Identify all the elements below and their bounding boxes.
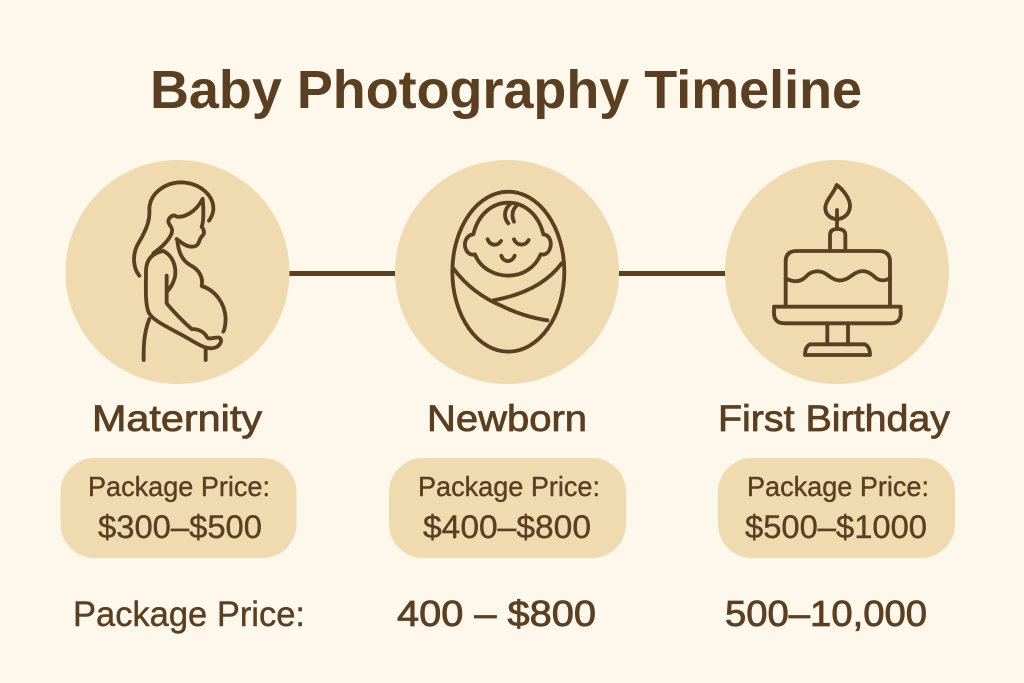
timeline connector: maternity to newborn [289,271,396,276]
price pill: maternity: $300–$500 [98,509,262,545]
price pill: newborn: $400–$800 [423,509,591,545]
price pill: maternity [60,458,296,558]
price pill: maternity: Package Price: [88,471,270,502]
price pill: newborn [389,458,626,558]
title: Baby Photography Timeline [150,60,862,120]
circle: first birthday [725,160,949,384]
circle: maternity [66,160,290,384]
bottom text: newborn price: 400 – $800 [397,593,596,634]
heading: First Birthday: First Birthday [718,398,951,439]
price pill: first birthday [718,458,955,558]
heading: Newborn: Newborn [427,398,587,439]
icon: pregnant woman [134,182,226,360]
icon: birthday cake [774,185,901,355]
bottom text: package price label: Package Price: [73,595,305,634]
bottom text: first birthday price: 500–10,000 [725,593,927,634]
price pill: newborn: Package Price: [418,471,600,502]
icon: swaddled newborn [452,192,564,352]
timeline connector: newborn to first birthday [618,271,726,276]
price pill: first birthday: Package Price: [747,471,929,502]
circle: newborn [395,160,619,384]
price pill: first birthday: $500–$1000 [745,509,927,545]
heading: Maternity: Maternity [92,398,263,439]
